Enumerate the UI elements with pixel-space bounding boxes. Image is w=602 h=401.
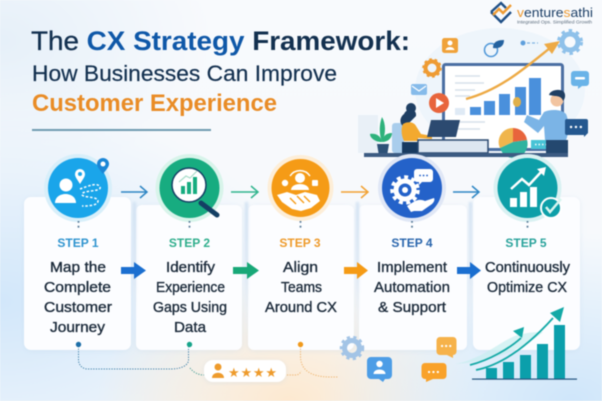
step 2 description [153, 260, 227, 336]
panel: step 1 card [24, 197, 131, 350]
step 2 description: Data [174, 320, 207, 336]
title line 2: How Businesses Can Improve [32, 61, 337, 86]
icon: pale gear [341, 337, 363, 359]
growth arrow [466, 41, 560, 99]
step connector dots [78, 221, 528, 229]
step 3 description: Align [283, 260, 318, 276]
step 1 description: Customer [44, 300, 112, 316]
panel: step 3 card [248, 205, 354, 350]
step 2 description: Identify [166, 260, 216, 276]
block arrow: step 4 [457, 262, 481, 279]
step 5 description [485, 260, 571, 296]
chart bars [486, 325, 565, 379]
icon: dark chat bubble [565, 119, 588, 137]
man presenting [513, 90, 568, 153]
step 3 description: Teams [281, 280, 322, 296]
step 2 label: STEP 2 [169, 236, 210, 250]
block arrow: step 1 [121, 262, 146, 279]
panel: step 2 card [136, 205, 242, 350]
panel: step 4 card [359, 205, 467, 350]
icon: chat bubble light blue [571, 71, 589, 89]
step 2 text [153, 236, 227, 336]
arrow: step 1 to 2 [121, 186, 147, 198]
logo tagline: Integrated Ops. Simplified Growth [517, 20, 592, 24]
title line 1: The CX Strategy Framework: [31, 26, 410, 56]
block arrow: step 3 [344, 262, 368, 279]
arrow: step 4 to 5 [453, 186, 479, 198]
icon: step 2 magnifier [156, 154, 224, 222]
step 5 description: Continuously [485, 260, 571, 276]
logo [491, 3, 593, 24]
growth arrows [470, 318, 553, 370]
woman with laptop [392, 103, 488, 153]
pie chart [499, 128, 528, 158]
step 1 description: Map the [50, 260, 106, 276]
icon: step 4 automation gear and hand [378, 154, 446, 222]
step 1 text [44, 236, 112, 336]
step 5 label: STEP 5 [505, 236, 547, 250]
icon: dotted link [520, 40, 538, 46]
step 3 text [265, 236, 337, 316]
icon: step 5 growth chart with check [494, 154, 562, 222]
step 1 description [44, 260, 112, 336]
step 1 label: STEP 1 [57, 236, 99, 250]
block arrow: step 2 [233, 262, 259, 279]
step 3 description [265, 260, 337, 316]
icon: blue gear [558, 30, 582, 54]
step 1 description: Journey [50, 320, 106, 336]
step 5 text [485, 236, 571, 296]
step 4 description [374, 260, 450, 316]
rating stars: ★★★★ [228, 366, 277, 381]
plant [370, 117, 392, 153]
logo wordmark: venturesathi [517, 5, 593, 20]
arrow: step 2 to 3 [231, 186, 258, 198]
step 1 description: Complete [44, 280, 111, 296]
step 2 description: Gaps Using [153, 300, 227, 316]
step 4 description: Automation [374, 280, 450, 296]
step 3 label: STEP 3 [279, 236, 321, 250]
arrow: step 3 to 4 [341, 186, 368, 198]
title block [31, 26, 410, 117]
step cards row [24, 197, 580, 350]
dotted connectors [76, 342, 339, 377]
icon: step 1 journey map [44, 154, 112, 222]
step 5 description: Optimize CX [487, 280, 567, 296]
step 4 label: STEP 4 [391, 236, 433, 250]
panel: step 5 card [473, 197, 580, 350]
icon: orange chat bubble upper [436, 337, 456, 358]
step 2 description: Experience [156, 280, 225, 296]
hero illustration [358, 28, 589, 158]
step 3 description: Around CX [265, 300, 337, 316]
icon: person [212, 364, 224, 378]
growth bar chart [455, 307, 577, 380]
small teal card [531, 140, 552, 149]
monitor bar chart [455, 78, 541, 115]
icon: play button [429, 93, 449, 113]
icon: envelope [411, 84, 427, 95]
icon: orange chat bubble lower [422, 363, 446, 382]
title line 3: Customer Experience [32, 90, 277, 117]
icon: orange gear [424, 60, 440, 76]
step 4 description: & Support [378, 300, 446, 316]
rating badge [204, 360, 286, 382]
logo mark [491, 3, 511, 22]
step 4 description: Implement [377, 260, 447, 276]
icon: pie and leaf [484, 40, 504, 56]
icon: profile card [442, 38, 458, 53]
icon: person chat bubble [367, 357, 392, 382]
icon: step 3 handshake team [268, 155, 334, 221]
step 4 text [374, 236, 450, 316]
monitor [444, 64, 562, 150]
